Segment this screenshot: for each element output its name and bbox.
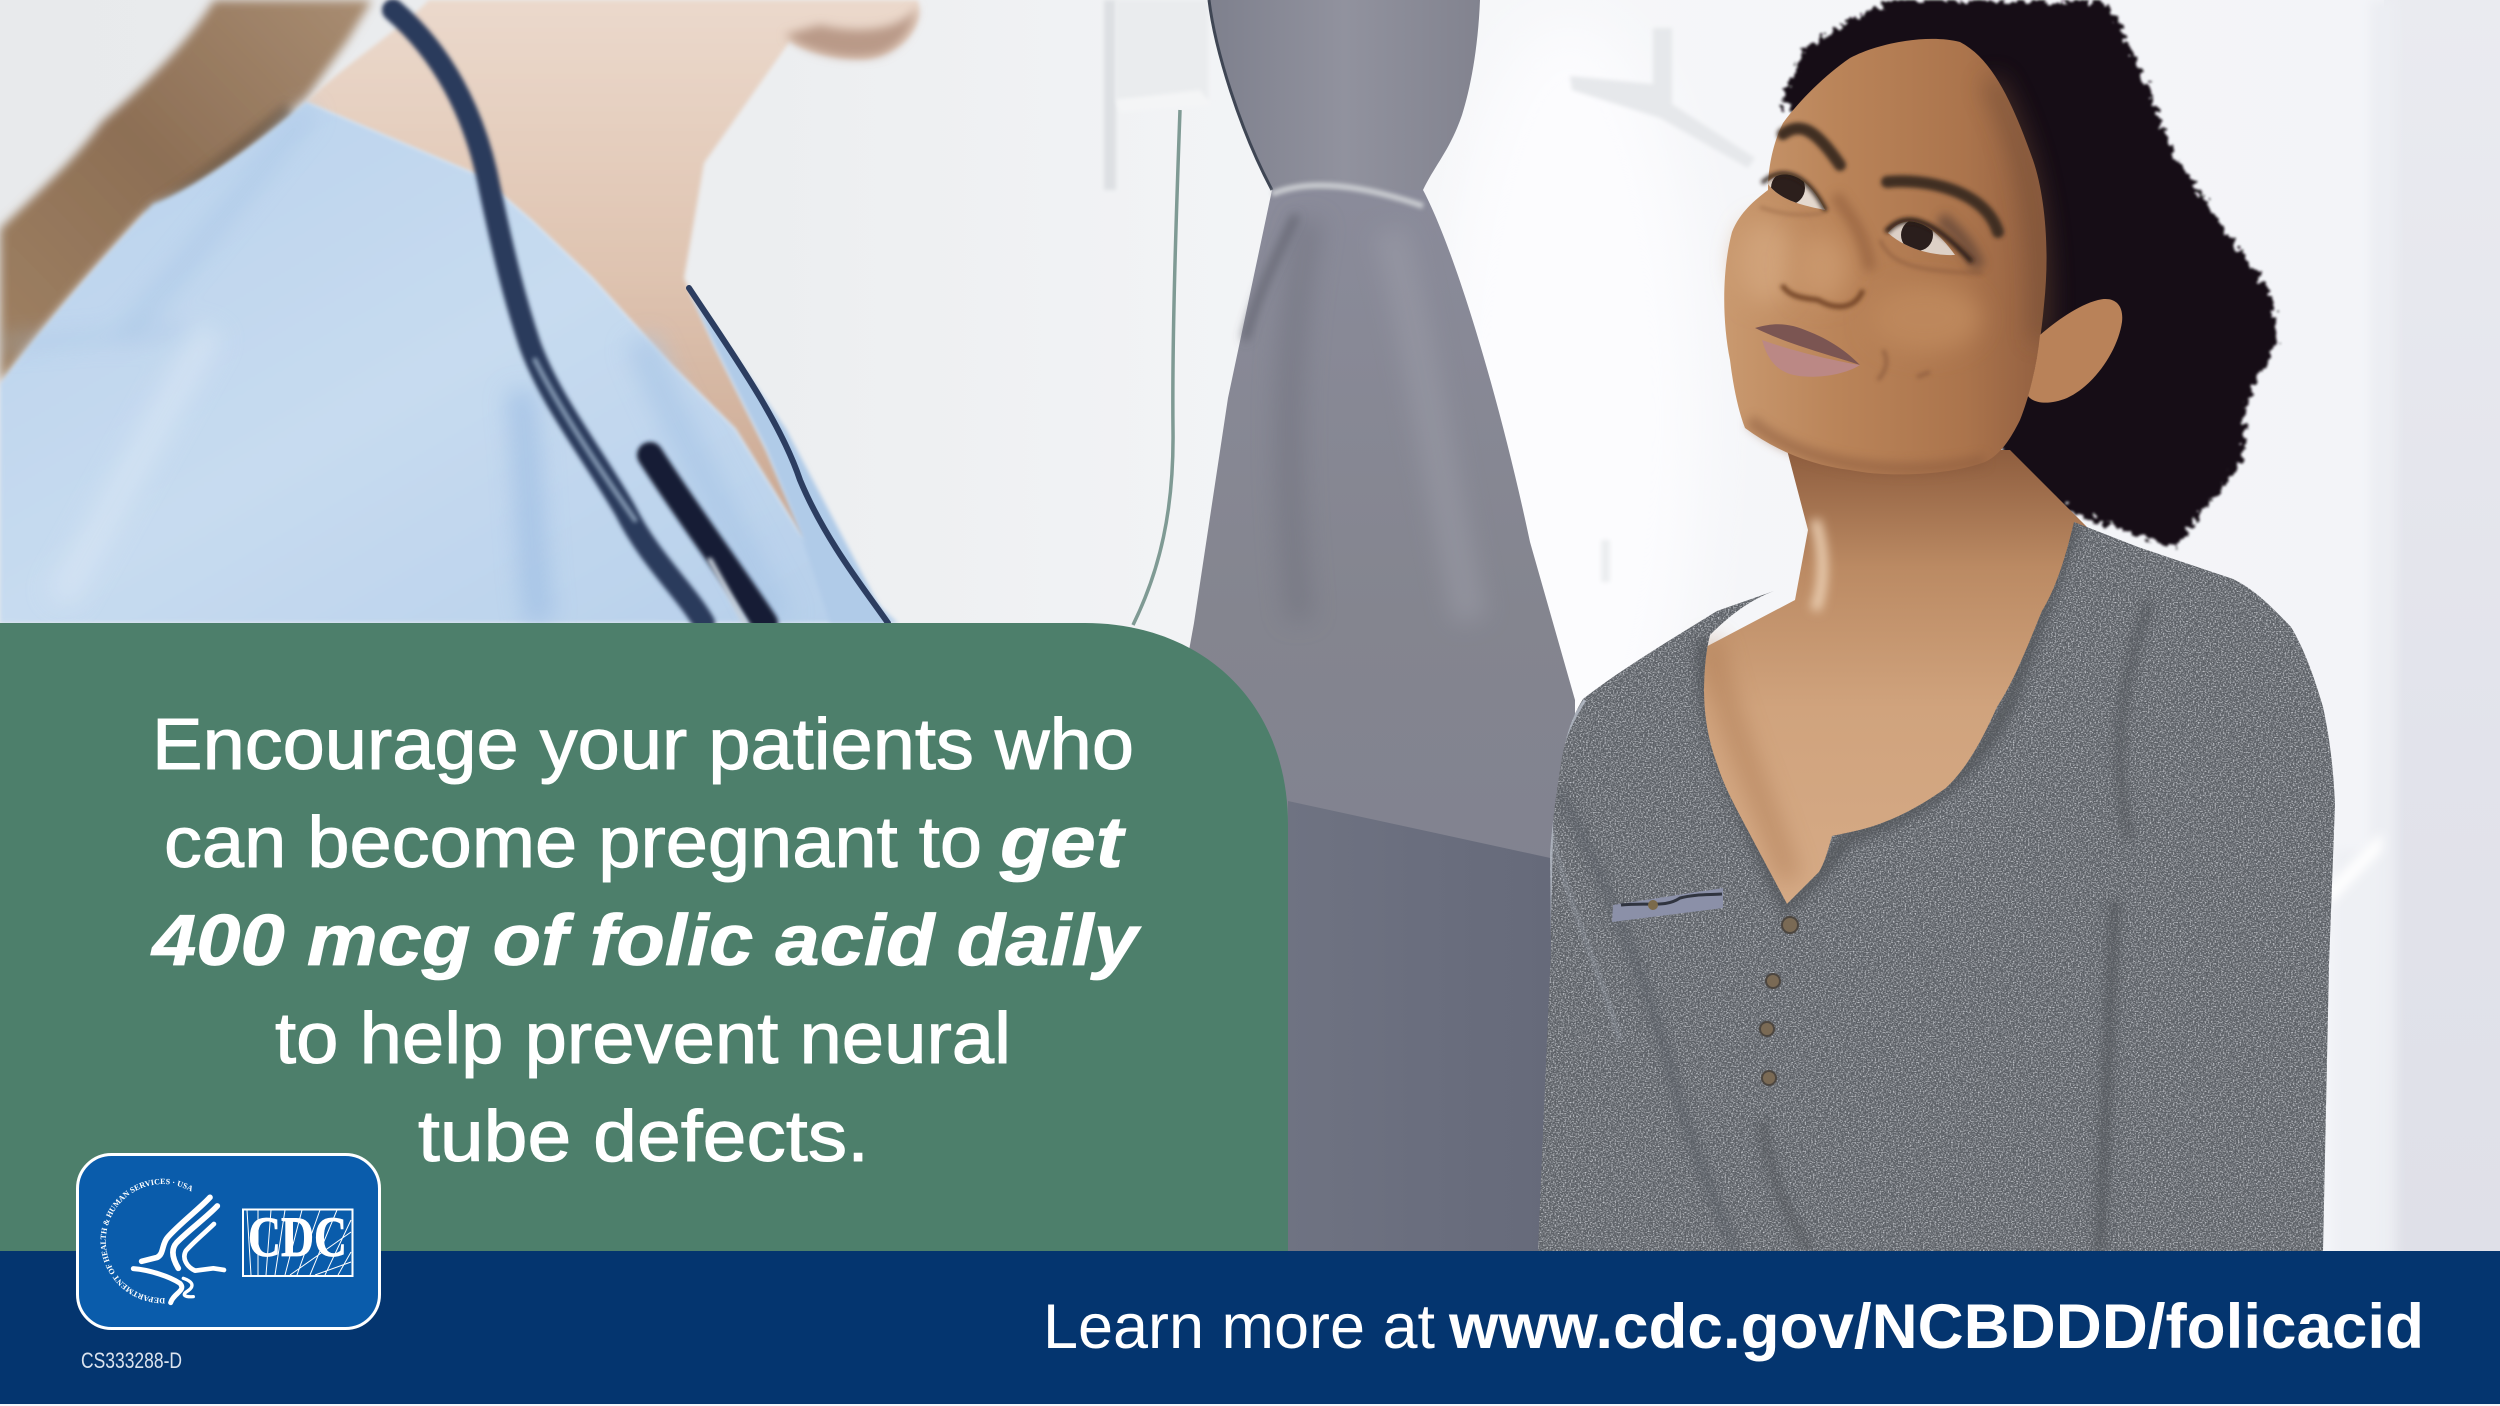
nurse scrub top [0, 102, 898, 623]
curtain: darker lower band [1288, 801, 1555, 1251]
shirt pocket [1612, 888, 1723, 922]
learn more label: Learn more at [1043, 1292, 1435, 1362]
panel: green message [0, 623, 1288, 1251]
logo: HHS and CDC badge [76, 1153, 381, 1330]
line 2: can become pregnant to [164, 803, 982, 883]
right eye and brow [1886, 181, 1998, 268]
grey henley shirt [1530, 510, 2340, 1255]
nurse scrub right sliver [689, 290, 888, 623]
woman hair [1781, 0, 2275, 547]
url: www.cdc.gov/NCBDDD/folicacid [1448, 1292, 2424, 1362]
lips [1755, 324, 1860, 377]
CDC logo [243, 1206, 352, 1276]
wall bracket [1570, 28, 1755, 582]
stethoscope tubes [393, 10, 888, 623]
line 3 emphasis: 400 mcg of folic acid daily [150, 901, 1142, 981]
shirt buttons [1760, 917, 1798, 1085]
woman neck and chest [1700, 450, 2090, 920]
right wall column [2325, 0, 2500, 1260]
HHS eagle [133, 1197, 224, 1303]
left eye and brow [1762, 128, 1840, 211]
line 4: to help prevent neural [275, 999, 1011, 1079]
document code: CS333288-D [81, 1348, 182, 1373]
curtain tie [1272, 185, 1423, 206]
woman face [1724, 39, 2047, 474]
nurse hair [0, 0, 372, 384]
woman patient [1530, 0, 2340, 1255]
face shading [1737, 80, 2041, 469]
bright wall glow [1440, 20, 1700, 820]
nose [1782, 285, 1863, 307]
line 2 emphasis: get [999, 803, 1126, 883]
curtain: upper gathered part [1209, 0, 1480, 190]
HHS seal ring text: DEPARTMENT OF HEALTH & HUMAN SERVICES · USA [100, 1178, 192, 1304]
CDC letters: CDC [248, 1206, 347, 1269]
line 5: tube defects. [418, 1097, 869, 1177]
curtain: lower drape [1180, 190, 1575, 1251]
window frame and wire [1104, 0, 1212, 625]
heading message text [150, 705, 1142, 1177]
ear [2028, 299, 2122, 403]
line 1: Encourage your patients who [152, 705, 1134, 785]
nurse (out of focus) [0, 0, 919, 623]
nurse neck and chin [306, 0, 919, 539]
footer band [0, 1251, 2500, 1406]
